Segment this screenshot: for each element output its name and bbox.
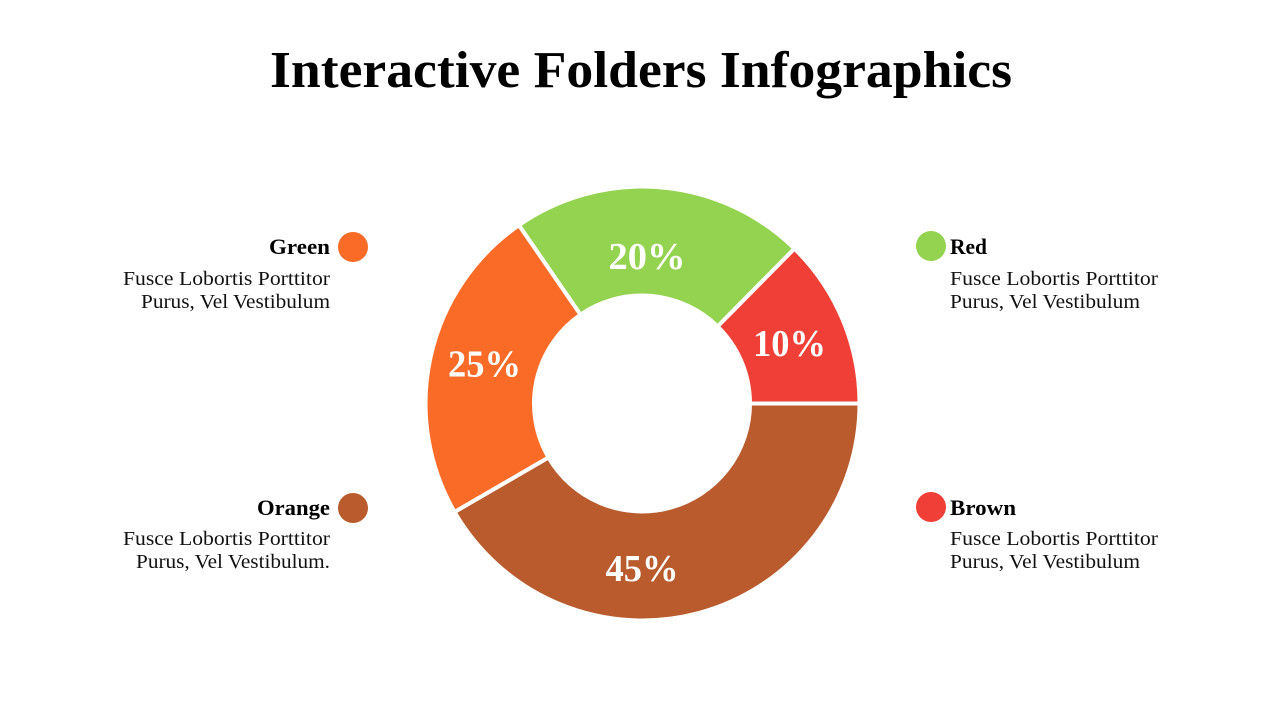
value: 45%: 45%	[606, 548, 678, 590]
value: 20%: 20%	[608, 236, 686, 278]
legend heading: Red: Red	[950, 234, 987, 259]
donut chart	[426, 187, 860, 620]
legend: Red	[916, 231, 1158, 313]
legend heading: Brown: Brown	[950, 495, 1016, 520]
legend marker: orange dot	[338, 232, 368, 262]
legend marker: brown dot	[338, 493, 368, 523]
legend marker: green dot	[916, 231, 946, 261]
legend description: Purus, Vel Vestibulum	[950, 291, 1140, 313]
legend: Orange	[123, 493, 368, 573]
segment: brown 45%	[455, 404, 860, 620]
legend heading: Orange: Orange	[257, 495, 330, 520]
segment: red 10%	[718, 249, 860, 404]
value: 25%: 25%	[448, 344, 521, 386]
legend heading: Green: Green	[269, 234, 330, 259]
value: 10%: 10%	[753, 323, 826, 365]
legend description: Purus, Vel Vestibulum	[141, 291, 330, 313]
legend: Brown	[916, 492, 1158, 573]
segment: orange 25%	[426, 225, 580, 512]
legend description: Purus, Vel Vestibulum	[950, 551, 1140, 573]
legend: Green	[123, 232, 368, 313]
segment: green 20%	[519, 187, 794, 326]
legend description: Fusce Lobortis Porttitor	[123, 268, 330, 290]
legend description: Fusce Lobortis Porttitor	[950, 268, 1158, 290]
legend marker: red dot	[916, 492, 946, 522]
legend description: Fusce Lobortis Porttitor	[950, 528, 1158, 550]
title: Interactive Folders Infographics	[270, 42, 1012, 99]
legend description: Fusce Lobortis Porttitor	[123, 528, 330, 550]
legend description: Purus, Vel Vestibulum.	[136, 551, 330, 573]
